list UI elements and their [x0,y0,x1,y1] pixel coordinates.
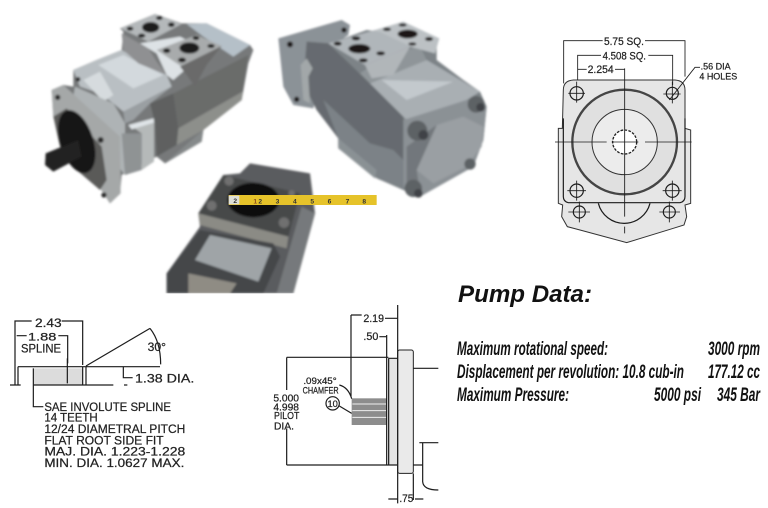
pilot diameter note: 5.000 [273,394,299,405]
measuring tape: 2 [258,199,262,206]
dimension: .75: .75 [399,493,413,505]
drawing: front flange view with bolt holes [555,36,737,243]
dimension: 2.43: 2.43 [35,316,62,330]
measuring tape: 3 [276,199,280,206]
dimension lines [564,41,700,100]
row: maximum pressure [457,385,761,406]
measuring tape: 8 [362,199,366,206]
spline specification notes [44,400,186,470]
pilot diameter note: 4.998 [273,402,299,413]
heading: Pump Data: Pump Data: [458,281,592,308]
dimension: 1.38 dia: 1.38 DIA. [135,371,194,385]
dimension: 1.88 spline: 1.88 [28,331,56,343]
row: maximum pressure: 5000 psi [654,385,701,406]
dimension: 1.88 spline: SPLINE [21,341,61,355]
measuring tape: 7 [346,199,350,206]
dimension: .50: .50 [363,331,378,343]
spline specification notes: MAJ. DIA. 1.223-1.228 [44,445,186,459]
measuring tape: 5 [310,199,314,206]
drawing: side profile with pilot and shaft [273,305,438,505]
angle: 30 degrees: 30° [148,340,166,354]
spline specification notes: 12/24 DIAMETRAL PITCH [44,422,185,436]
spline specification notes: MIN. DIA. 1.0627 MAX. [44,456,184,470]
dimension: 2.19: 2.19 [363,313,384,325]
pilot diameter note [273,394,300,432]
measuring tape: 6 [328,199,332,206]
label: hole diameter: 4 HOLES [699,71,737,81]
spline specification notes: 14 TEETH [44,411,98,425]
pilot diameter note: PILOT [274,411,300,422]
measuring tape: 4 [293,199,297,206]
dimension: 1.88 spline [21,331,61,355]
callout: item 10: 10 [327,399,338,409]
pilot diameter note: DIA. [274,421,294,432]
measuring tape: 2 [233,198,237,205]
photo: pump, front three-quarter view with shaft [45,14,253,203]
measuring tape: 1 [253,199,257,206]
dimension: 2.254: 2.254 [588,64,614,76]
label: hole diameter [699,61,737,81]
dimension: 4.508 SQ.: 4.508 SQ. [603,51,646,63]
spline specification notes: FLAT ROOT SIDE FIT [44,433,164,447]
measuring tape [229,195,377,206]
chamfer note: .09x45° [303,376,337,386]
drawing: shaft spline detail [10,316,194,470]
panel: pump data [457,281,761,406]
callout: item 10 [326,397,339,410]
photo: pump, rear three-quarter view with end cap [278,20,487,198]
row: maximum pressure: Maximum Pressure: [457,385,569,406]
dimension: 5.75 SQ.: 5.75 SQ. [604,36,644,48]
row: maximum rotational speed: Maximum rotational speed: [457,339,608,360]
bolt holes [567,82,682,222]
label: hole diameter: .56 DIA [701,61,731,71]
chamfer note: CHAMFER [303,385,339,395]
chamfer note [303,376,339,395]
photo: pump top with measuring tape across port [167,163,377,293]
spline specification notes: SAE INVOLUTE SPLINE [44,400,171,414]
